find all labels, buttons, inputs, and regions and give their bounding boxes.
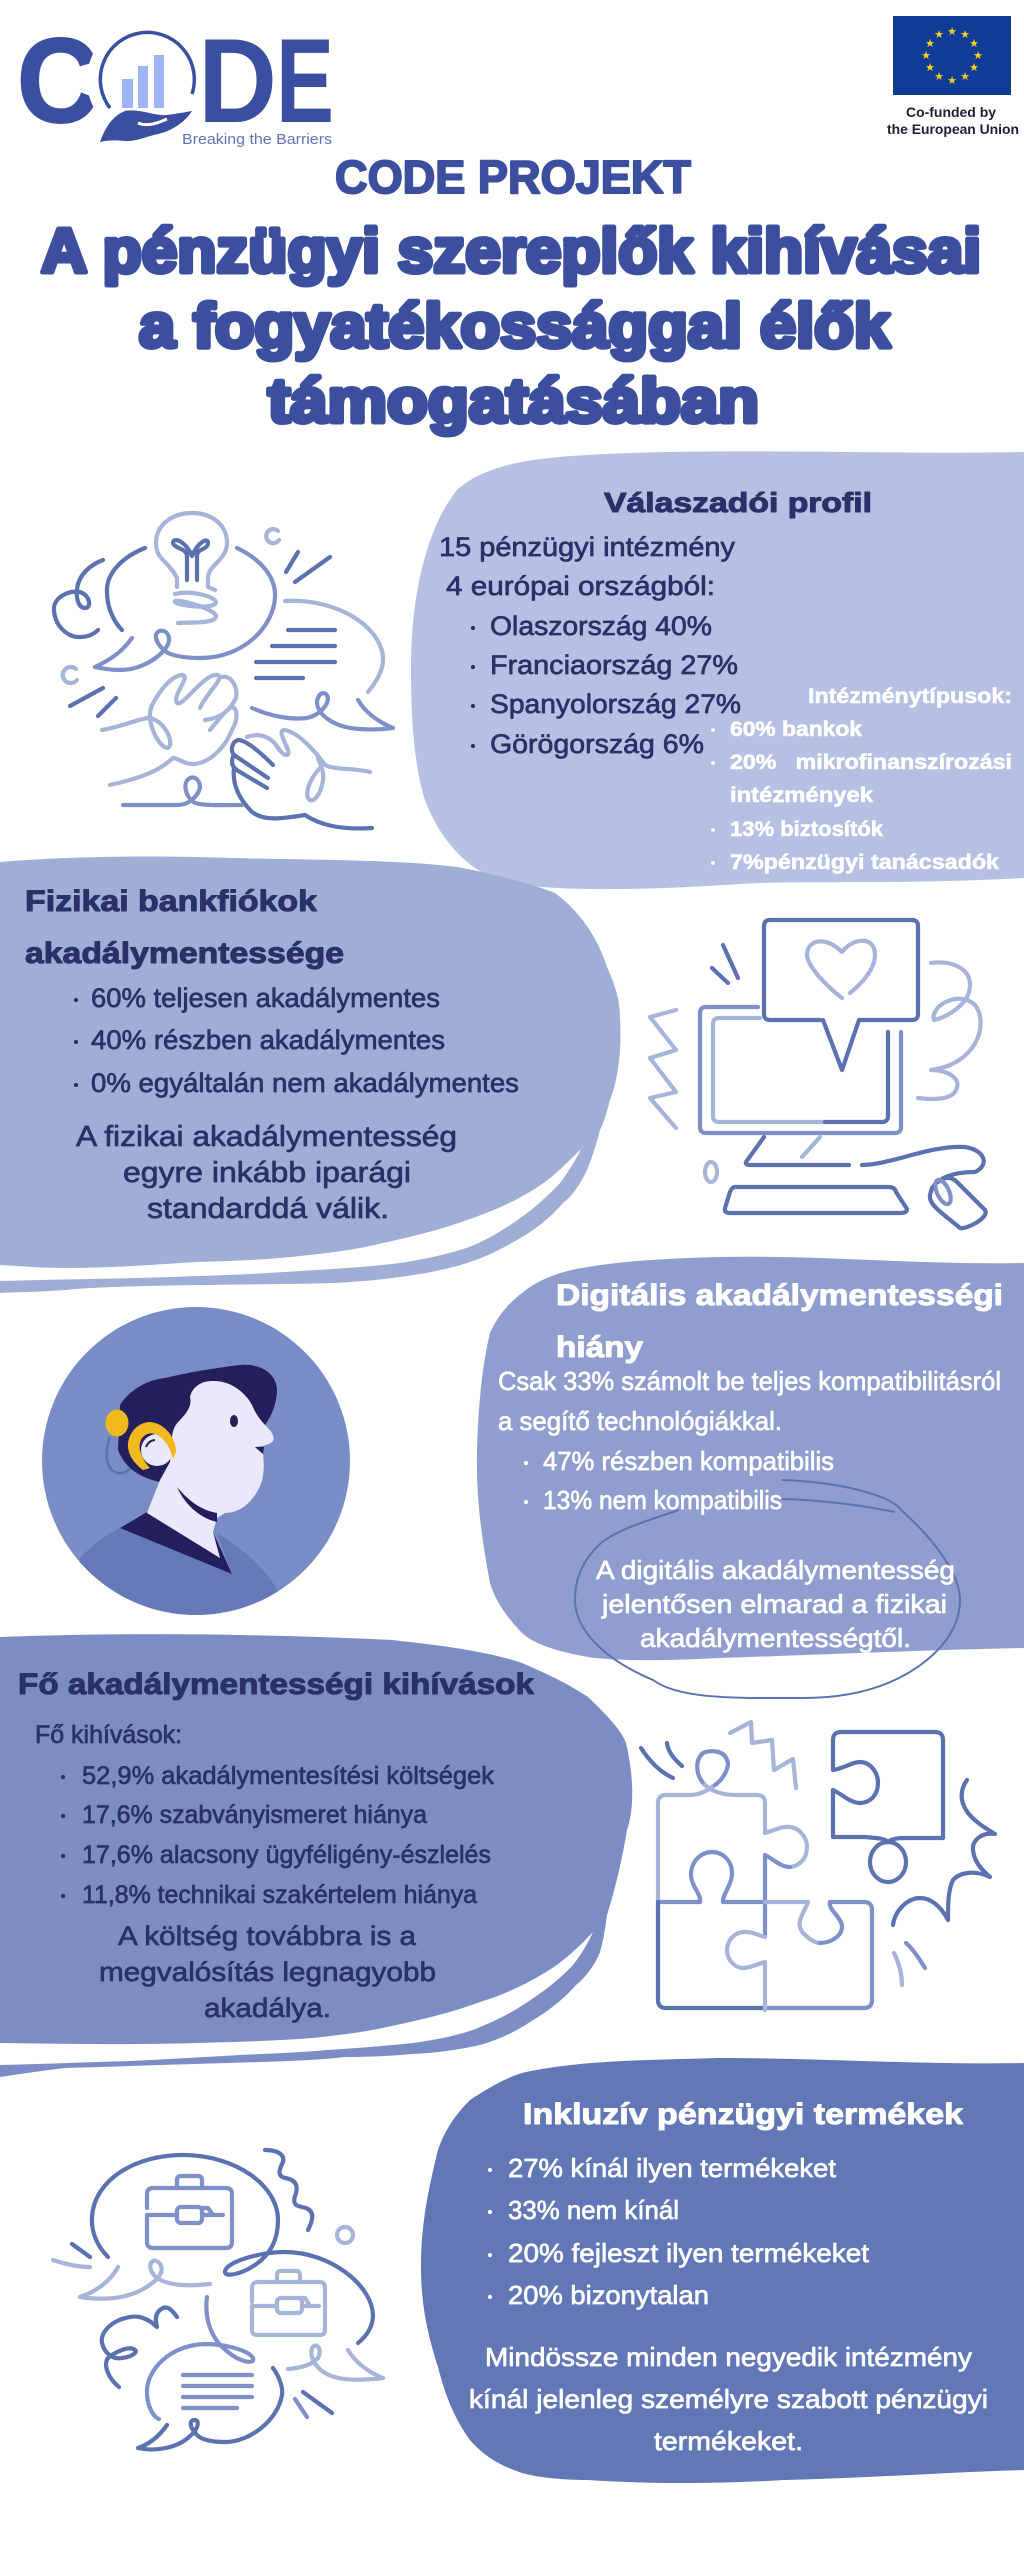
EU flag: ★ [934, 29, 944, 41]
EU flag: Co-funded by [906, 104, 996, 120]
products list: 27% kínál ilyen termékeket [508, 2153, 837, 2183]
EU flag: ★ [960, 29, 970, 41]
heading [25, 885, 344, 970]
EU flag: ★ [925, 38, 935, 50]
illustration: person with hearing aid [42, 1307, 350, 1640]
products list: 33% nem kínál [508, 2195, 679, 2225]
main title: a fogyatékossággal élők [139, 292, 891, 361]
institution types: intézmények [730, 784, 873, 807]
EU flag: ★ [947, 26, 957, 38]
products list: 20% bizonytalan [508, 2280, 709, 2310]
heading [556, 1279, 1003, 1364]
country list: Franciaország 27% [490, 650, 738, 680]
compatibility text: a segítő technológiákkal. [498, 1406, 782, 1436]
institution types: 60% bankok [730, 718, 862, 741]
takeaway: akadálya. [204, 1993, 331, 2023]
takeaway: Mindössze minden negyedik intézmény [485, 2342, 972, 2372]
heading: akadálymentessége [25, 937, 344, 970]
institution types [711, 685, 1012, 874]
logo: CODE [17, 14, 334, 148]
EU flag: ★ [947, 75, 957, 87]
takeaway: egyre inkább iparági [123, 1157, 411, 1189]
main title: támogatásában [268, 367, 759, 436]
logo: CODE: E [276, 14, 334, 148]
country list: 15 pénzügyi intézmény [439, 532, 736, 562]
EU flag: ★ [925, 62, 935, 74]
accessibility list: 0% egyáltalán nem akadálymentes [91, 1068, 519, 1098]
institution types: 20% mikrofinanszírozási [730, 751, 1012, 774]
challenges list: 11,8% technikai szakértelem hiánya [82, 1881, 477, 1909]
heading: hiány [556, 1331, 643, 1364]
country list: Spanyolország 27% [490, 689, 741, 719]
icon: speech bubbles with briefcases [53, 2150, 383, 2450]
heading: Válaszadói profil [604, 487, 872, 518]
main title: A pénzügyi szereplők kihívásai [41, 217, 981, 286]
compatibility text: Csak 33% számolt be teljes kompatibilitásról [498, 1366, 1001, 1396]
EU flag: ★ [973, 50, 983, 62]
panel background [411, 451, 1024, 889]
takeaway [76, 1121, 457, 1225]
swoosh gap [0, 1149, 581, 1281]
EU flag: ★ [921, 50, 931, 62]
panel: physical accessibility [0, 857, 621, 1293]
challenges list: 17,6% alacsony ügyféligény-észlelés [82, 1841, 491, 1869]
compatibility text: 47% részben kompatibilis [543, 1446, 834, 1476]
country list [439, 532, 741, 759]
heading: Digitális akadálymentességi [556, 1279, 1003, 1312]
takeaway [99, 1921, 436, 2023]
subtitle: CODE PROJEKT [335, 151, 691, 203]
accessibility list: 60% teljesen akadálymentes [91, 983, 440, 1013]
heading: Fizikai bankfiókok [25, 885, 317, 918]
takeaway: termékeket. [654, 2426, 803, 2456]
institution types: 13% biztosítók [730, 818, 883, 841]
panel background with swoosh tail [0, 857, 621, 1293]
challenges list: Fő kihívások: [35, 1721, 182, 1749]
takeaway: megvalósítás legnagyobb [99, 1957, 436, 1987]
products list: 20% fejleszt ilyen termékeket [508, 2238, 870, 2268]
country list: Görögország 6% [490, 729, 704, 759]
icon: computer with heart [650, 920, 986, 1228]
takeaway: A költség továbbra is a [118, 1921, 417, 1951]
takeaway [469, 2342, 988, 2456]
challenges list [35, 1721, 494, 1909]
icon: puzzle pieces [641, 1722, 995, 2010]
panel background [421, 2058, 1024, 2483]
compatibility text [498, 1366, 1001, 1515]
accessibility list [74, 983, 519, 1098]
swoosh gap [0, 1932, 593, 2065]
EU flag: the European Union [887, 121, 1019, 137]
compatibility text: 13% nem kompatibilis [543, 1485, 782, 1515]
panel background with swoosh tail [0, 1634, 632, 2077]
country list: 4 európai országból: [446, 571, 715, 601]
EU flag: ★ [934, 71, 944, 83]
products list [488, 2153, 870, 2310]
panel: respondent profile [411, 451, 1024, 889]
accessibility list: 40% részben akadálymentes [91, 1025, 445, 1055]
main title [41, 217, 981, 436]
takeaway: kínál jelenleg személyre szabott pénzügyi [469, 2384, 988, 2414]
EU flag: ★ [969, 38, 979, 50]
heading: Fő akadálymentességi kihívások [18, 1668, 534, 1701]
icon: lightbulb and hands [54, 513, 393, 828]
challenges list: 17,6% szabványismeret hiánya [82, 1801, 427, 1829]
challenges list: 52,9% akadálymentesítési költségek [82, 1762, 494, 1790]
logo: CODE: D [198, 14, 277, 148]
country list: Olaszország 40% [490, 611, 712, 641]
logo: CODE: C [17, 14, 99, 148]
takeaway: A fizikai akadálymentesség [76, 1121, 457, 1153]
heading: Inkluzív pénzügyi termékek [523, 2098, 963, 2131]
EU flag [887, 16, 1019, 137]
oval callout: jelentősen elmarad a fizikai [601, 1589, 947, 1619]
oval callout [575, 1480, 960, 1698]
logo: CODE: Breaking the Barriers [182, 131, 332, 148]
panel: digital accessibility [477, 1257, 1024, 1698]
institution types: 7%pénzügyi tanácsadók [730, 851, 999, 874]
panel: inclusive financial products [421, 2058, 1024, 2483]
institution types: Intézménytípusok: [808, 685, 1012, 708]
EU flag: ★ [969, 62, 979, 74]
panel background [477, 1257, 1024, 1660]
oval callout: akadálymentességtől. [640, 1623, 911, 1653]
EU flag: ★ [960, 71, 970, 83]
oval callout: A digitális akadálymentesség [596, 1555, 955, 1585]
takeaway: standarddá válik. [147, 1193, 389, 1225]
panel: main accessibility challenges [0, 1634, 632, 2077]
